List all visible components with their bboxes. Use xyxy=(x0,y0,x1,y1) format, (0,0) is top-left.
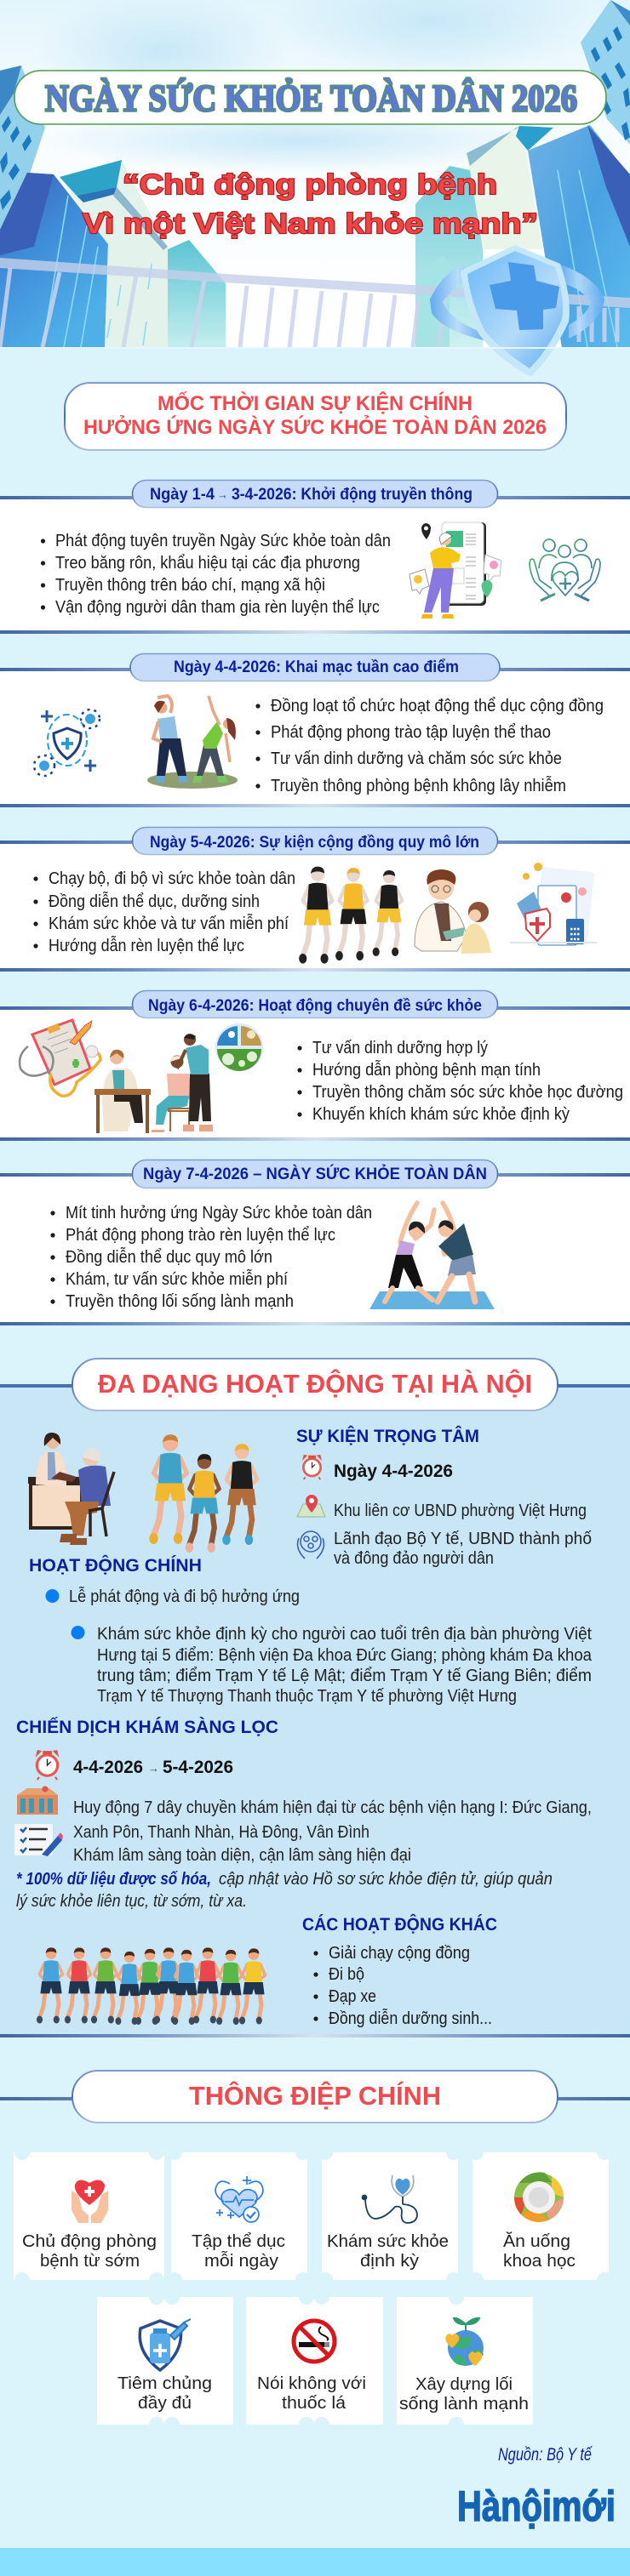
campaign dates: 4-4-2026 xyxy=(73,1758,143,1777)
slogan xyxy=(83,168,538,239)
panel: day 1-4 to 3-4 xyxy=(0,480,630,634)
icon: clock xyxy=(36,1750,59,1780)
footer band xyxy=(0,2548,630,2576)
icon: plate of food xyxy=(514,2172,564,2222)
icon: no smoking xyxy=(294,2321,335,2362)
card: regular checkup: Khám sức khỏe xyxy=(327,2231,449,2251)
panel: day 5-4 xyxy=(0,827,630,972)
heading: key messages xyxy=(0,2071,630,2123)
icon: earth with plant xyxy=(445,2318,484,2366)
heading: other activities: CÁC HOẠT ĐỘNG KHÁC xyxy=(302,1914,497,1935)
list: other activities xyxy=(313,1944,492,2028)
illustration: group of ten runners xyxy=(37,1947,266,2025)
card: proactive prevention: Chủ động phòng xyxy=(22,2231,157,2251)
panel: day 4-4: Truyền thông phòng bệnh không lây nhiễm xyxy=(271,776,566,795)
card: regular checkup xyxy=(327,2175,449,2271)
icon: hospital xyxy=(17,1787,58,1815)
header illustration: city skyline with shield xyxy=(0,0,630,377)
panel: day 7-4: Khám, tư vấn sức khỏe miễn phí xyxy=(66,1269,288,1289)
panel: day 1-4 to 3-4: Truyền thông trên báo chí, mạng xã hội xyxy=(55,576,325,595)
card: balanced diet xyxy=(503,2172,576,2271)
list: main activities: Khám sức khỏe định kỳ cho người cao tuổi trên địa bàn phường Việt xyxy=(97,1624,592,1644)
illustration: two people stretching xyxy=(147,696,238,789)
panel: day 6-4: Khuyến khích khám sức khỏe định kỳ xyxy=(312,1105,570,1124)
card: proactive prevention: bệnh từ sớm xyxy=(40,2251,140,2271)
heading: timeline: MỐC THỜI GIAN SỰ KIỆN CHÍNH xyxy=(158,391,472,415)
icon: clock xyxy=(302,1455,322,1479)
panel: day 5-4: Ngày 5-4-2026: Sự kiện cộng đồng quy mô lớn xyxy=(150,833,479,852)
card: healthy lifestyle: Xây dựng lối xyxy=(415,2374,513,2394)
card: say no to tobacco xyxy=(257,2321,366,2413)
panel: day 1-4 to 3-4: → xyxy=(217,488,228,501)
heading: timeline xyxy=(65,383,566,450)
list: main activities: Hưng tại 5 điểm: Bệnh viện Đa khoa Đức Giang; phòng khám Đa khoa xyxy=(97,1645,593,1665)
panel: day 7-4: Ngày 7-4-2026 – NGÀY SỨC KHỎE TOÀN DÂN xyxy=(143,1163,487,1183)
source: Nguồn: Bộ Y tế xyxy=(498,2445,593,2465)
panel: day 6-4: Hướng dẫn phòng bệnh mạn tính xyxy=(312,1060,541,1080)
panel: day 7-4: Mít tinh hưởng ứng Ngày Sức khỏe toàn dân xyxy=(66,1204,372,1222)
event location: Khu liên cơ UBND phường Việt Hưng xyxy=(334,1501,587,1520)
event participants: Lãnh đạo Bộ Y tế, UBND thành phố xyxy=(334,1529,592,1548)
icon: vaccine shield xyxy=(140,2319,191,2370)
event participants xyxy=(334,1529,592,1568)
panel: day 1-4 to 3-4: Phát động tuyên truyền Ngày Sức khỏe toàn dân xyxy=(55,532,391,550)
panel: day 5-4: Khám sức khỏe và tư vấn miễn phí xyxy=(49,914,289,933)
panel: day 7-4 xyxy=(0,1160,630,1325)
heading: key messages: THÔNG ĐIỆP CHÍNH xyxy=(189,2080,441,2111)
panel: day 6-4: Tư vấn dinh dưỡng hợp lý xyxy=(312,1039,488,1057)
panel: day 7-4: Truyền thông lối sống lành mạnh xyxy=(66,1292,294,1311)
panel: day 4-4 xyxy=(0,653,630,807)
panel: day 6-4: Ngày 6-4-2026: Hoạt động chuyên đề sức khỏe xyxy=(148,996,482,1015)
illustration: three runners xyxy=(299,867,402,963)
campaign description: Xanh Pôn, Thanh Nhàn, Hà Đông, Vân Đình xyxy=(73,1822,369,1842)
campaign dates: 5-4-2026 xyxy=(163,1758,233,1777)
panel: day 6-4 xyxy=(0,990,630,1141)
panel: day 4-4: Đồng loạt tổ chức hoạt động thể dục cộng đồng xyxy=(271,697,604,715)
card: full vaccination xyxy=(117,2319,212,2413)
slogan: Vì một Việt Nam khỏe mạnh” xyxy=(83,208,538,239)
campaign dates xyxy=(73,1758,233,1777)
card: regular checkup: định kỳ xyxy=(360,2251,420,2271)
heading: Hanoi activities xyxy=(72,1359,558,1411)
card: daily exercise: mỗi ngày xyxy=(204,2251,279,2271)
card: full vaccination: Tiêm chủng xyxy=(117,2374,212,2393)
campaign description: Khám lâm sàng toàn diện, cận lâm sàng hiện đại xyxy=(73,1845,411,1865)
heading: focus event: SỰ KIỆN TRỌNG TÂM xyxy=(296,1426,479,1446)
icon: strong heart xyxy=(215,2176,263,2222)
panel: day 1-4 to 3-4: Ngày 1-4 xyxy=(150,485,215,504)
icon: location pin xyxy=(297,1495,325,1517)
heading: Hanoi activities: ĐA DẠNG HOẠT ĐỘNG TẠI HÀ NỘI xyxy=(98,1368,532,1399)
list: main activities: Trạm Y tế Thượng Thanh thuộc Trạm Y tế phường Việt Hưng xyxy=(97,1686,517,1706)
illustration: doctor and child xyxy=(415,869,491,954)
illustration: doctor checking elderly patient xyxy=(28,1433,114,1545)
note: digitised data xyxy=(16,1869,553,1911)
panel: day 4-4: Tư vấn dinh dưỡng và chăm sóc sức khỏe xyxy=(271,749,562,768)
list: other activities: Đạp xe xyxy=(329,1987,376,2006)
list: other activities: Đồng diễn dưỡng sinh... xyxy=(329,2009,492,2028)
illustration: clipboard and stethoscope xyxy=(20,1020,100,1096)
card: say no to tobacco: Nói không với xyxy=(257,2374,366,2393)
panel: day 1-4 to 3-4: Vận động người dân tham gia rèn luyện thể lực xyxy=(55,598,380,617)
panel: day 5-4: Hướng dẫn rèn luyện thể lực xyxy=(49,936,244,955)
illustration: doctor with patient xyxy=(94,1034,213,1133)
panel: Hanoi activities background xyxy=(0,1384,630,2037)
card: healthy lifestyle: sống lành mạnh xyxy=(399,2394,529,2414)
event date: Ngày 4-4-2026 xyxy=(334,1462,453,1481)
panel: day 1-4 to 3-4: 3-4-2026: Khởi động truyền thông xyxy=(232,485,472,504)
icon: checklist xyxy=(14,1824,63,1856)
list: other activities: Giải chạy cộng đồng xyxy=(329,1944,470,1963)
note: digitised data: * 100% dữ liệu được số hóa, xyxy=(16,1869,211,1889)
list: main activities xyxy=(46,1587,593,1706)
icon: people in hands xyxy=(298,1531,324,1559)
panel: day 4-4: Ngày 4-4-2026: Khai mạc tuần cao điểm xyxy=(174,658,459,676)
panel: day 4-4: Phát động phong trào tập luyện thể thao xyxy=(271,723,551,742)
card: daily exercise: Tập thể dục xyxy=(192,2231,285,2251)
heading: main activities: HOẠT ĐỘNG CHÍNH xyxy=(29,1555,202,1576)
note: digitised data: cập nhật vào Hồ sơ sức khỏe điện tử, giúp quản xyxy=(219,1869,553,1889)
illustration: couple exercising on mat xyxy=(369,1203,495,1309)
illustration: health insurance xyxy=(510,863,597,945)
campaign description xyxy=(73,1798,592,1865)
panel: day 5-4: Đồng diễn thể dục, dưỡng sinh xyxy=(49,892,260,911)
campaign dates: → xyxy=(148,1762,159,1775)
card: say no to tobacco: thuốc lá xyxy=(282,2393,346,2413)
panel: day 1-4 to 3-4: Treo băng rôn, khẩu hiệu tại các địa phương xyxy=(55,554,360,573)
card: balanced diet: khoa học xyxy=(503,2251,576,2271)
card backgrounds with notches xyxy=(14,2145,612,2432)
card: healthy lifestyle xyxy=(399,2318,529,2414)
illustration: person with phone xyxy=(410,522,501,618)
icon: community care xyxy=(530,539,600,601)
panel: day 7-4: Đồng diễn thể dục quy mô lớn xyxy=(66,1247,272,1267)
card: full vaccination: đầy đủ xyxy=(138,2393,192,2413)
icon: heart in hands xyxy=(72,2180,108,2223)
list: main activities: Lễ phát động và đi bộ hưởng ứng xyxy=(69,1587,300,1606)
heading: timeline: HƯỞNG ỨNG NGÀY SỨC KHỎE TOÀN DÂN 2026 xyxy=(83,414,547,439)
card: proactive prevention xyxy=(22,2180,157,2271)
card: daily exercise xyxy=(192,2176,285,2271)
panel: day 7-4: Phát động phong trào rèn luyện thể lực xyxy=(66,1226,335,1245)
icon: stethoscope xyxy=(363,2175,417,2223)
heading: screening campaign: CHIẾN DỊCH KHÁM SÀNG LỌC xyxy=(16,1718,278,1737)
slogan: “Chủ động phòng bệnh xyxy=(123,168,497,200)
list: other activities: Đi bộ xyxy=(329,1965,364,1984)
icon: virus shield xyxy=(34,710,100,776)
panel: day 5-4: Chạy bộ, đi bộ vì sức khỏe toàn dân xyxy=(49,869,295,888)
card: balanced diet: Ăn uống xyxy=(503,2231,570,2251)
illustration: nutrition plate xyxy=(215,1023,263,1071)
note: digitised data: lý sức khỏe liên tục, từ sớm, từ xa. xyxy=(16,1891,247,1911)
footer band of the header image xyxy=(0,347,630,349)
illustration: three people jogging xyxy=(149,1434,257,1553)
list: main activities: trung tâm; điểm Trạm Y tế Lệ Mật; điểm Trạm Y tế Giang Biên; điểm xyxy=(97,1666,592,1685)
event participants: và đông đảo người dân xyxy=(334,1548,494,1568)
